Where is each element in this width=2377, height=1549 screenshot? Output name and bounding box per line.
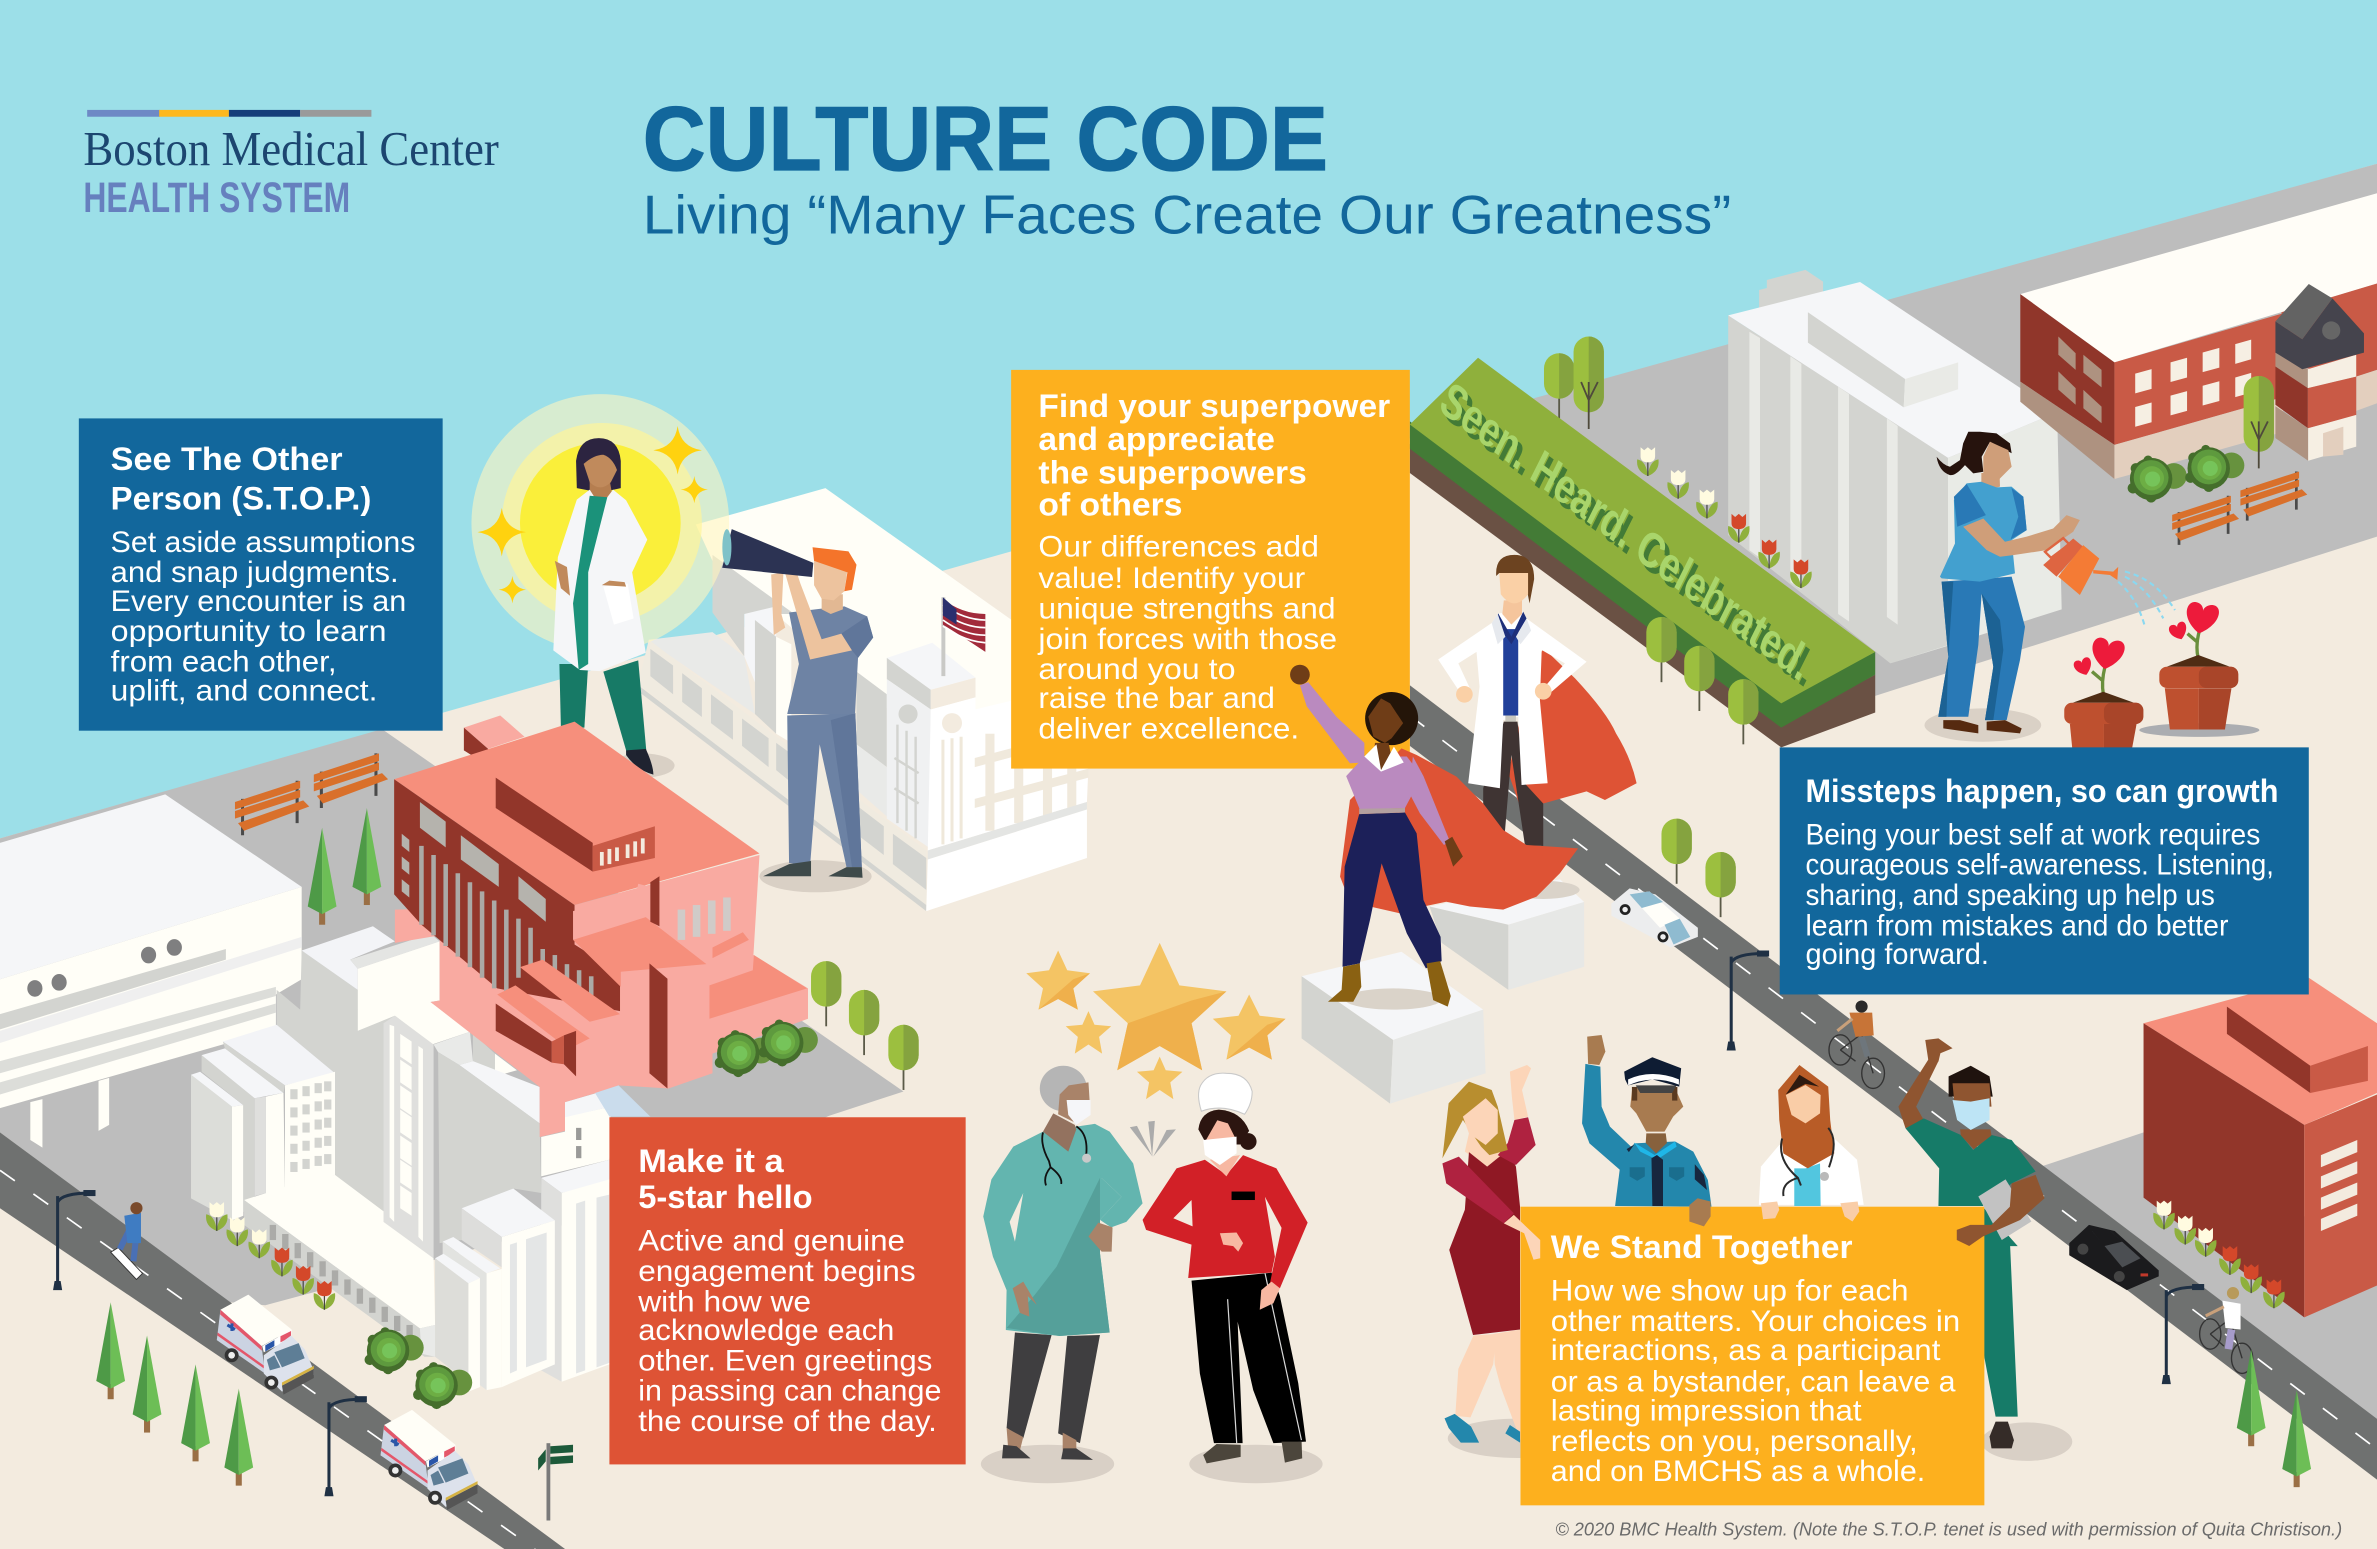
heading: of others [1038,485,1182,522]
icon: burst lines [1130,1121,1176,1157]
panel: 5-star hello [609,1117,966,1464]
body text: unique strengths and [1038,593,1336,626]
person: gardener [1924,432,2080,742]
body text: Set aside assumptions [111,526,415,559]
body text: deliver excellence. [1038,712,1299,745]
body text: Our differences add [1038,530,1319,563]
shrubs by pink building [715,1019,818,1077]
black car [2069,1225,2159,1290]
heading: 5-star hello [638,1178,813,1215]
body text: other. Even greetings [638,1344,932,1377]
body text: around you to [1038,653,1235,686]
body text: reflects on you, personally, [1551,1425,1918,1458]
logo name: Boston Medical Center [83,123,499,176]
pedestal blocks [1302,879,1584,1104]
pink hospital building [394,716,808,1137]
copyright note: © 2020 BMC Health System. (Note the S.T.O.P. tenet is used with permission of Quita Christison.) [1555,1520,2342,1540]
body text: and snap judgments. [111,556,399,589]
body text: learn from mistakes and do better [1805,909,2229,942]
body text: Being your best self at work requires [1805,818,2260,851]
halo stars [478,426,708,603]
pine trees back [308,808,381,925]
lawn sign [1410,358,1875,747]
trees behind lawn [1544,337,1604,429]
gold stars [1026,943,1286,1099]
glowing halo [471,394,729,652]
body text: How we show up for each [1551,1275,1909,1308]
tulips upper [1637,447,1812,588]
roads [0,685,2377,1549]
signpost [538,1443,573,1521]
red brick school [2020,193,2377,479]
body text: raise the bar and [1038,682,1275,715]
benches right [2172,471,2307,545]
body text: acknowledge each [638,1314,894,1347]
body text: or as a bystander, can leave a [1551,1366,1956,1399]
person: woman doctor [553,438,675,778]
person: chef [1143,1073,1323,1483]
heading: We Stand Together [1551,1228,1853,1265]
cyclist 2 [2200,1287,2253,1373]
panel: see the other person [79,418,443,731]
tulips lower right [2153,1201,2285,1308]
trees on lawn [1646,617,1758,744]
panel: we stand together [1520,1207,1984,1505]
tree pair on road [1661,819,1736,917]
panel: superpower [1011,370,1410,769]
body text: value! Identify your [1038,562,1305,595]
hands over panel [1504,1175,2045,1260]
body text: interactions, as a participant [1551,1334,1940,1367]
body text: Every encounter is an [111,585,406,618]
benches left [235,753,388,835]
logo [83,110,499,221]
person: doctor in hijab [1759,1065,1864,1206]
logo color bars [87,110,371,117]
panel: missteps [1780,747,2309,994]
person: older doctor [981,1066,1143,1483]
heading: Make it a [638,1142,785,1179]
icon: american flag [941,597,985,676]
person: superhero woman [1290,665,1578,1007]
trees by pink building [811,961,919,1090]
title: CULTURE CODE [643,89,1328,190]
person: woman in red dress [1442,1065,1587,1458]
body text: other matters. Your choices in [1551,1305,1960,1338]
person: man with telescope [722,529,873,892]
body text: going forward. [1805,938,1989,971]
body text: courageous self-awareness. Listening, [1805,849,2274,882]
lawn slogan shadow: Seen. Heard. Celebrated. [1437,377,1825,697]
gray rooftop behind white tower [1759,270,1823,326]
tulips left [206,1202,335,1310]
lawn slogan: Seen. Heard. Celebrated. [1433,371,1820,691]
person: nurse in green [1898,1038,2072,1461]
body text: the course of the day. [638,1405,937,1438]
person: police officer [1582,1035,1712,1207]
flag building [638,488,1088,911]
white hospital complex [191,926,611,1392]
white tower right [1728,282,2062,663]
cyclist 1 [1829,1001,1884,1088]
person: superhero doctor [1438,555,1637,846]
body text: sharing, and speaking up help us [1805,879,2215,912]
shrubs lower left [365,1327,472,1409]
body text: join forces with those [1037,623,1337,656]
body text: engagement begins [638,1255,916,1288]
heading: and appreciate [1038,420,1275,457]
heading: the superpowers [1038,454,1307,491]
body text: lasting impression that [1551,1394,1862,1427]
lower left pines [96,1302,253,1486]
body text: uplift, and connect. [111,674,377,707]
street lamps left [53,1190,367,1496]
logo subtitle: HEALTH SYSTEM [83,174,350,221]
tree by school [2244,376,2274,468]
body text: Active and genuine [638,1225,905,1258]
icon: watering can [2043,538,2175,627]
white car [1611,888,1698,947]
white bridge building [0,794,302,1148]
body text: in passing can change [638,1375,941,1408]
body text: with how we [637,1285,811,1318]
red building lower right [2144,978,2377,1317]
plant pots [2064,601,2259,752]
lamps right [1727,951,2204,1384]
pines lower right [2237,1349,2311,1487]
heading: Find your superpower [1038,387,1390,424]
body text: from each other, [111,646,337,679]
skateboarder [111,1202,142,1279]
subtitle: Living “Many Faces Create Our Greatness” [643,184,1731,245]
heading: Missteps happen, so can growth [1805,772,2278,809]
ambulances [217,1295,478,1510]
heading: See The Other [111,440,343,477]
shrubs by school [2128,445,2244,503]
body text: and on BMCHS as a whole. [1551,1455,1925,1488]
body text: opportunity to learn [111,615,387,648]
heading: Person (S.T.O.P.) [111,479,371,516]
